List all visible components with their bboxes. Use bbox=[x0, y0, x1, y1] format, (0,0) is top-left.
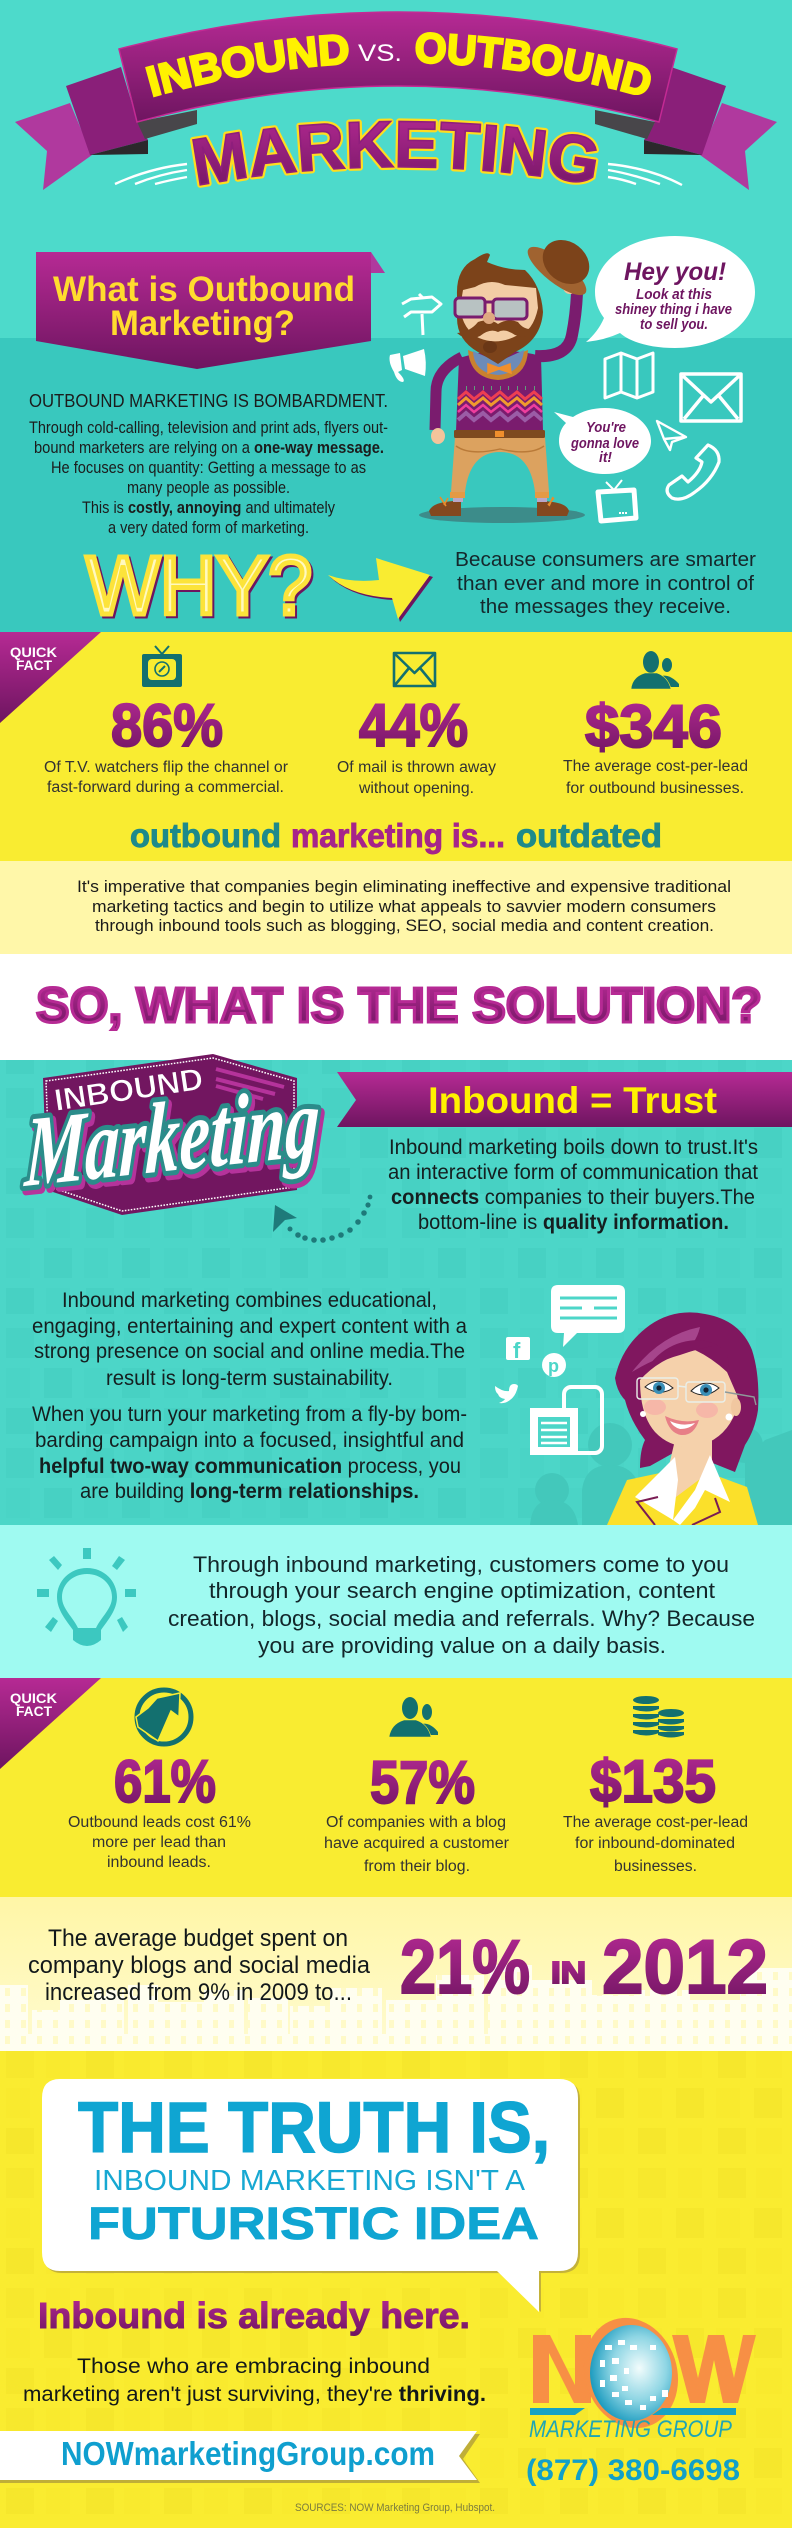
panel: what is outbound heading bbox=[36, 252, 385, 369]
panel: light bulb text bbox=[0, 1525, 792, 1678]
text block: customers come to you: through your search engine optimization, content bbox=[209, 1578, 716, 1603]
body copy: many people as possible. bbox=[127, 479, 290, 497]
lead sentence: OUTBOUND MARKETING IS BOMBARDMENT. bbox=[29, 391, 388, 411]
icon: people bbox=[389, 1697, 438, 1737]
badge word: inbound: INBOUND bbox=[52, 1061, 205, 1118]
bubble text bbox=[570, 420, 639, 466]
sources: SOURCES: NOW Marketing Group, Hubspot. bbox=[295, 2502, 495, 2514]
caption: 61%: more per lead than bbox=[92, 1834, 226, 1851]
icon: people bbox=[631, 651, 679, 689]
icon: arrow circle bbox=[136, 1690, 191, 1744]
text block: inbound trust: an interactive form of communication that bbox=[388, 1161, 758, 1184]
nose bbox=[483, 312, 495, 324]
caption: $135: for inbound-dominated bbox=[575, 1835, 735, 1852]
text block: average budget: company blogs and social media bbox=[28, 1952, 371, 1979]
caption: 57%: from their blog. bbox=[364, 1858, 470, 1875]
blazer bbox=[607, 1473, 758, 1525]
stat: $135: $135 bbox=[590, 1748, 716, 1815]
earrings bbox=[640, 1411, 646, 1417]
callout: hey you bbox=[586, 236, 755, 348]
text block: average budget: The average budget spent on bbox=[48, 1925, 348, 1952]
icon: document bbox=[530, 1408, 578, 1455]
icon: pinterest bbox=[542, 1353, 566, 1377]
caption: 44% bbox=[337, 759, 496, 797]
logo N bbox=[533, 2335, 591, 2403]
phone number: (877) 380-6698 bbox=[526, 2454, 740, 2487]
face bbox=[460, 282, 538, 341]
icon: pinterest: p bbox=[548, 1356, 559, 1376]
arrow: dotted cursor bbox=[273, 1195, 372, 1243]
text block: customers come to you: you are providing value on a daily basis. bbox=[258, 1633, 666, 1658]
title word: inbound: INBOUND bbox=[145, 34, 349, 98]
ribbon: website bbox=[0, 2431, 480, 2483]
bubble text: Look at this bbox=[636, 287, 712, 303]
trousers bbox=[451, 437, 549, 492]
heading: why: WHY? bbox=[86, 539, 312, 632]
caption: 57% bbox=[324, 1814, 509, 1875]
ear bbox=[731, 1398, 741, 1416]
panel: imperative text: It's imperative that companies begin eliminating ineffective and expensive traditional bbox=[77, 877, 731, 896]
mouth bbox=[665, 1416, 699, 1435]
quick fact tag bbox=[0, 632, 101, 723]
text block: why answer bbox=[455, 549, 756, 618]
text block: customers come to you bbox=[168, 1552, 755, 1658]
stat: 21% in 2012: IN bbox=[551, 1955, 586, 1990]
caption: 57%: Of companies with a blog bbox=[326, 1814, 506, 1831]
stat: 57%: 57% bbox=[370, 1749, 475, 1816]
badge word: marketing bbox=[22, 1064, 325, 1212]
stat: 21% in 2012: 21% bbox=[400, 1925, 530, 2010]
bubble bbox=[586, 236, 755, 348]
bubble text: it! bbox=[599, 450, 612, 466]
heading: why: WHY? bbox=[88, 541, 314, 634]
ribbon: website: NOWmarketingGroup.com bbox=[61, 2435, 435, 2472]
bubble text: Hey you! bbox=[624, 258, 726, 286]
caption: $346 bbox=[563, 758, 748, 797]
goatee bbox=[483, 341, 497, 353]
bubble line 1: THE TRUTH IS, bbox=[78, 2089, 550, 2168]
title: inbound vs outbound bbox=[145, 32, 651, 98]
text block: inbound trust bbox=[388, 1136, 758, 1234]
panel background bbox=[0, 1897, 792, 2051]
text block: inbound description: helpful two-way communication process, you bbox=[39, 1455, 461, 1478]
bubble text: gonna love bbox=[570, 436, 639, 452]
badge plate bbox=[43, 1054, 297, 1215]
body copy: This is costly, annoying and ultimately bbox=[82, 499, 336, 517]
caption: $135: The average cost-per-lead bbox=[563, 1814, 748, 1831]
badge: inbound marketing bbox=[22, 1054, 325, 1215]
text block: inbound description: strong presence on social and online media.The bbox=[34, 1340, 465, 1363]
heading fold bbox=[371, 252, 385, 273]
panel background bbox=[0, 632, 792, 861]
logo globe bbox=[590, 2325, 672, 2421]
caption: 44%: without opening. bbox=[358, 780, 474, 797]
background pattern bbox=[0, 1060, 792, 1525]
text block: why answer: Because consumers are smarter bbox=[455, 549, 756, 571]
icon: television bbox=[598, 480, 636, 521]
arrow bbox=[328, 558, 433, 622]
icon: envelope bbox=[394, 653, 435, 686]
face bbox=[640, 1350, 738, 1447]
panel: imperative text: marketing tactics and begin to utilize what appeals to savvier modern consumers bbox=[92, 897, 716, 916]
spectacles bbox=[637, 1378, 756, 1405]
caption: $135: businesses. bbox=[614, 1858, 697, 1875]
body copy: Through cold-calling, television and print ads, flyers out- bbox=[29, 419, 388, 437]
character: hipster salesman bbox=[419, 231, 598, 523]
character: businesswoman bbox=[607, 1312, 758, 1525]
icon: megaphone bbox=[390, 349, 426, 382]
body copy bbox=[29, 419, 388, 537]
bubble text: shiney thing i have bbox=[615, 302, 732, 318]
hair highlight bbox=[632, 1327, 700, 1372]
text block: inbound description: are building long-term relationships. bbox=[80, 1480, 419, 1503]
text block: thriving bbox=[23, 2354, 486, 2406]
panel: inbound quick facts bbox=[0, 1678, 792, 1897]
heading: outbound marketing is outdated: outbound bbox=[130, 817, 281, 854]
hand right bbox=[563, 280, 577, 294]
quick fact tag: FACT bbox=[16, 657, 52, 673]
caption: $346: for outbound businesses. bbox=[566, 780, 744, 797]
panel background bbox=[0, 1678, 792, 1897]
badge dashed edge bbox=[46, 1058, 294, 1211]
icon: smartphone bbox=[564, 1387, 602, 1453]
text block: why answer: the messages they receive. bbox=[480, 596, 731, 618]
text block: inbound description: When you turn your marketing from a fly-by bom- bbox=[32, 1403, 467, 1426]
stat: $346: $346 bbox=[585, 693, 722, 760]
text block: inbound trust: Inbound marketing boils down to trust.It's bbox=[389, 1136, 758, 1159]
body copy: a very dated form of marketing. bbox=[108, 519, 309, 537]
callout: the truth is bbox=[42, 2079, 580, 2312]
quick fact tag bbox=[0, 1678, 101, 1769]
text block: outbound explanation bbox=[29, 391, 388, 537]
scarf bbox=[468, 350, 528, 380]
icon: light bulb bbox=[37, 1548, 136, 1646]
body copy: bound marketers are relying on a one-way message. bbox=[34, 439, 384, 457]
icon: map bbox=[605, 353, 653, 398]
text block: inbound description: Inbound marketing combines educational, bbox=[62, 1289, 437, 1312]
banner: inbound = trust: Inbound = Trust bbox=[428, 1080, 717, 1121]
belt bbox=[454, 430, 545, 438]
badge stripes bbox=[216, 1069, 284, 1099]
panel: imperative text: through inbound tools such as blogging, SEO, social media and content creation. bbox=[95, 916, 714, 935]
lapels bbox=[637, 1497, 720, 1525]
stat: 44%: 44% bbox=[359, 692, 468, 759]
raised arm bbox=[535, 293, 577, 356]
caption: 61% bbox=[68, 1814, 251, 1871]
badge word: marketing: Marketing bbox=[25, 1068, 324, 1212]
yellow pattern bbox=[0, 2051, 792, 2528]
icon: facebook bbox=[506, 1337, 530, 1363]
text block: thriving: Those who are embracing inbound bbox=[77, 2354, 430, 2378]
badge word: marketing: Marketing bbox=[22, 1065, 322, 1208]
caption: 61%: inbound leads. bbox=[107, 1854, 211, 1871]
speech bubble bbox=[42, 2079, 578, 2312]
panel: solution heading: SO, WHAT IS THE SOLUTION? bbox=[36, 979, 762, 1033]
panel: truth background bbox=[0, 2051, 792, 2528]
text block: thriving: marketing aren't just surviving, they're thriving. bbox=[23, 2382, 486, 2406]
hand left bbox=[431, 428, 445, 444]
icon: telephone bbox=[667, 445, 719, 499]
ribbon left tail bbox=[15, 67, 197, 190]
ribbon right tail bbox=[595, 67, 777, 190]
icon: coins bbox=[633, 1696, 684, 1738]
stat: 21% in 2012 bbox=[400, 1925, 768, 2010]
bubble text bbox=[615, 258, 732, 333]
title ribbon bbox=[15, 12, 777, 190]
speed lines bbox=[115, 164, 682, 185]
panel: outbound quick facts bbox=[0, 632, 792, 861]
text block: inbound description: result is long-term sustainability. bbox=[106, 1367, 393, 1390]
logo orange ring bbox=[570, 2306, 692, 2440]
heading: inbound is already here: Inbound is already here. bbox=[38, 2295, 470, 2336]
logo W bbox=[672, 2335, 756, 2403]
background: outbound teal bbox=[0, 338, 792, 633]
moustache bbox=[457, 320, 538, 338]
text block: customers come to you: creation, blogs, social media and referrals. Why? Because bbox=[168, 1606, 755, 1631]
caption: 44%: Of mail is thrown away bbox=[337, 759, 496, 776]
sweater bbox=[456, 351, 543, 431]
quick fact tag: QUICK bbox=[10, 644, 57, 660]
text block: inbound trust: bottom-line is quality information. bbox=[418, 1211, 729, 1234]
background: top teal bbox=[0, 0, 792, 338]
panel: budget stat bbox=[0, 1897, 792, 2051]
heading: outbound marketing is outdated: marketing is... bbox=[291, 817, 505, 854]
ribbon main band bbox=[119, 12, 677, 122]
bow tie bbox=[488, 364, 511, 373]
panel: solution heading bbox=[0, 954, 792, 1060]
heading: outbound marketing is outdated: outdated bbox=[516, 817, 662, 854]
icon: sign post bbox=[402, 294, 441, 335]
belt buckle bbox=[495, 431, 504, 437]
caption: $135 bbox=[563, 1814, 748, 1875]
glasses bbox=[455, 298, 527, 319]
neck bbox=[668, 1440, 712, 1500]
icon: tv bbox=[142, 646, 182, 687]
shoes bbox=[429, 500, 461, 516]
speech bubble shadow bbox=[44, 2081, 580, 2312]
caption: 86%: fast-forward during a commercial. bbox=[47, 779, 284, 796]
icon: paper plane bbox=[657, 421, 686, 450]
bubble text: to sell you. bbox=[640, 317, 708, 333]
text block: inbound description bbox=[32, 1289, 467, 1503]
title: marketing: MARKETING bbox=[192, 120, 597, 186]
eyes bbox=[645, 1381, 719, 1396]
text block: average budget bbox=[28, 1925, 371, 2006]
logo wordmark: MARKETING GROUP bbox=[529, 2416, 732, 2443]
stat: 21% in 2012: 2012 bbox=[602, 1925, 768, 2010]
text block: inbound trust: connects companies to their buyers.The bbox=[391, 1186, 755, 1209]
bubble line 3: FUTURISTIC IDEA bbox=[88, 2198, 539, 2249]
text block: inbound description: engaging, entertaining and expert content with a bbox=[32, 1315, 467, 1338]
banner: inbound = trust bbox=[337, 1072, 792, 1127]
bubble line 2: INBOUND MARKETING ISN'T A bbox=[94, 2165, 526, 2197]
quick fact tag: FACT bbox=[16, 1703, 52, 1719]
heading line 1: What is Outbound bbox=[53, 270, 355, 309]
text block: average budget: increased from 9% in 2009 to... bbox=[45, 1979, 352, 2006]
logo: now marketing group bbox=[529, 2306, 756, 2443]
icon: twitter bbox=[495, 1384, 518, 1403]
icon: envelope bbox=[681, 374, 741, 421]
shadow bbox=[419, 507, 585, 523]
icon: chat bubble bbox=[551, 1285, 625, 1347]
badge word: marketing: Marketing bbox=[22, 1065, 322, 1208]
hat bbox=[521, 231, 598, 303]
blush bbox=[644, 1399, 666, 1415]
caption: 61%: Outbound leads cost 61% bbox=[68, 1814, 251, 1831]
callout: you're gonna love it bbox=[554, 408, 651, 474]
sweater pattern bbox=[458, 388, 542, 420]
panel: imperative text bbox=[0, 861, 792, 954]
text block: inbound description: barding campaign into a focused, insightful and bbox=[35, 1429, 464, 1452]
text block: customers come to you: Through inbound marketing, customers come to you bbox=[193, 1552, 729, 1577]
body copy: He focuses on quantity: Getting a message to as bbox=[51, 459, 366, 477]
stat: 61%: 61% bbox=[114, 1748, 216, 1815]
caption: 57%: have acquired a customer bbox=[324, 1835, 509, 1852]
stat: 86%: 86% bbox=[111, 692, 223, 759]
icon: facebook: f bbox=[513, 1338, 521, 1363]
title word: outbound: OUTBOUND bbox=[415, 32, 651, 95]
heading: outbound marketing is outdated bbox=[130, 817, 662, 854]
caption: 86%: Of T.V. watchers flip the channel or bbox=[44, 759, 288, 776]
lowered arm bbox=[435, 357, 462, 430]
title: marketing: MARKETING bbox=[190, 118, 599, 188]
heading banner bbox=[36, 252, 371, 369]
trouser cuffs bbox=[450, 492, 549, 498]
caption: $346: The average cost-per-lead bbox=[563, 758, 748, 775]
text block: why answer: than ever and more in control of bbox=[457, 573, 754, 595]
fringe bbox=[640, 1340, 728, 1380]
title word: vs: VS. bbox=[358, 40, 402, 67]
bubble text: You're bbox=[586, 420, 626, 436]
logo bars bbox=[530, 2408, 736, 2415]
shirt collar bbox=[635, 1455, 730, 1525]
caption: 86% bbox=[44, 759, 288, 796]
background crowd silhouettes bbox=[530, 1423, 792, 1525]
city skyline bbox=[0, 1965, 792, 2051]
hair back bbox=[615, 1312, 758, 1472]
bubble bbox=[554, 408, 651, 474]
quick fact tag: QUICK bbox=[10, 1690, 57, 1706]
hair and beard bbox=[457, 253, 543, 364]
panel: inbound background bbox=[0, 1060, 792, 1525]
heading line 2: Marketing? bbox=[110, 304, 295, 343]
